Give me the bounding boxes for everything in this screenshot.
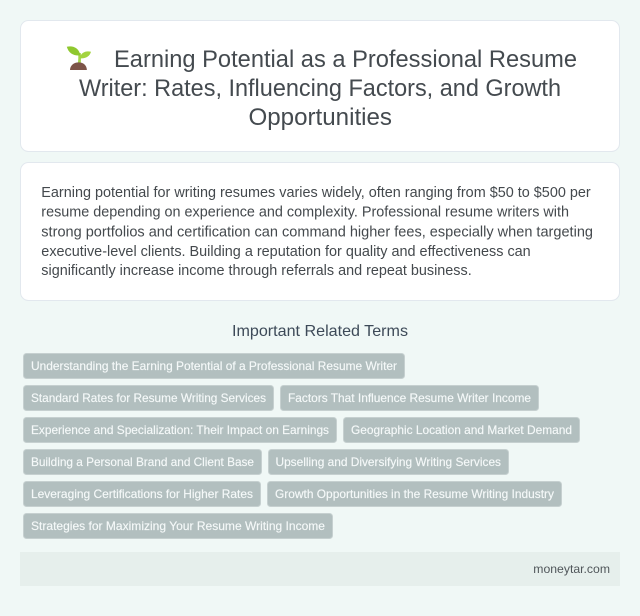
description text: significantly increase income through referrals and repeat business. (41, 263, 472, 279)
tag: experience and specialization: Experience and Specialization: Their Impact on Earnings (31, 423, 329, 437)
tag: experience and specialization (24, 418, 336, 442)
panel: title card (20, 20, 620, 152)
tag: income factors (280, 386, 538, 410)
tag: growth opportunities (268, 482, 562, 506)
tag: understanding earning potential: Understanding the Earning Potential of a Professional Resume Writer (31, 359, 397, 373)
title: Writer: Rates, Influencing Factors, and Growth (79, 75, 561, 102)
description text: Earning potential for writing resumes varies widely, often ranging from $50 to $500 per (41, 185, 591, 201)
tag: upselling: Upselling and Diversifying Writing Services (276, 455, 501, 469)
tag: standard rates (24, 386, 274, 410)
tag: maximizing income: Strategies for Maximizing Your Resume Writing Income (31, 519, 325, 533)
tag: personal brand (24, 450, 262, 474)
description text: executive-level clients. Building a reputation for quality and effectiveness can (41, 244, 531, 260)
tag: maximizing income (24, 514, 332, 538)
footer source text: moneytar.com (533, 562, 610, 576)
heading: important related terms: Important Related Terms (232, 323, 408, 340)
panel: description card (20, 162, 620, 300)
tag: personal brand: Building a Personal Brand and Client Base (31, 455, 254, 469)
title: Opportunities (248, 104, 392, 131)
tag: geographic location (344, 418, 580, 442)
tag: certifications (24, 482, 260, 506)
tag: income factors: Factors That Influence Resume Writer Income (288, 391, 531, 405)
description text: resume depending on experience and complexity. Professional resume writers with (41, 205, 569, 221)
tag: certifications: Leveraging Certifications for Higher Rates (31, 487, 253, 501)
description text: strong portfolios and certification can command higher fees, especially when targeting (41, 225, 593, 241)
icon: seedling (67, 46, 91, 70)
tag: understanding earning potential (24, 354, 404, 378)
tag: geographic location: Geographic Location and Market Demand (351, 423, 572, 437)
panel: related term tags (24, 354, 580, 538)
tag: standard rates: Standard Rates for Resume Writing Services (31, 391, 266, 405)
title: Earning Potential as a Professional Resume (114, 46, 577, 73)
tag: upselling (268, 450, 508, 474)
description text (41, 185, 593, 279)
tag: growth opportunities: Growth Opportunities in the Resume Writing Industry (275, 487, 554, 501)
title (79, 46, 577, 131)
footer bar (20, 552, 620, 586)
